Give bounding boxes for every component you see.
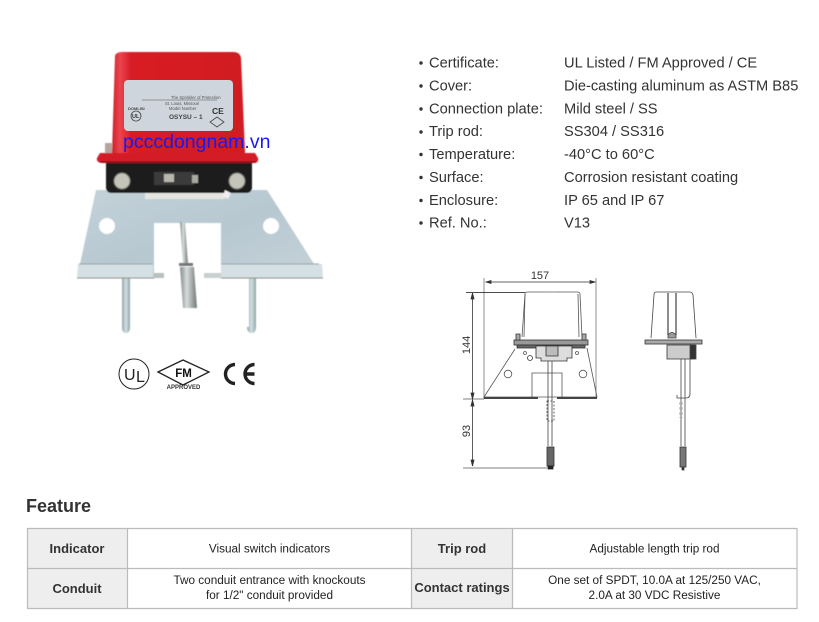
row: indicator: Indicator	[50, 541, 104, 556]
icon: UL mark: L	[136, 369, 145, 386]
heading: Feature: Feature	[26, 496, 91, 516]
spec: cover: Die-casting aluminum as ASTM B85	[564, 78, 798, 94]
spec: enclosure: IP 65 and IP 67	[564, 193, 664, 209]
row: conduit: Conduit	[52, 581, 102, 596]
row: conduit	[52, 574, 366, 602]
row: trip rod: Trip rod	[438, 541, 486, 556]
header cell backgrounds	[27, 528, 512, 608]
icon: UL mark: U	[124, 367, 136, 384]
dimension lines	[461, 270, 596, 468]
row: contact ratings: 2.0A at 30 VDC Resistive	[589, 589, 721, 602]
bracket	[484, 348, 597, 398]
spec: ref no: V13	[564, 216, 590, 232]
cover	[651, 292, 696, 338]
feature table	[27, 528, 797, 608]
dimension lines: 144	[461, 336, 473, 354]
spec: certificate: Certificate:	[429, 56, 499, 72]
mounting plate	[77, 190, 323, 278]
row: conduit: for 1/2" conduit provided	[206, 589, 333, 602]
spec: connection plate: Connection plate:	[429, 102, 543, 118]
row: contact ratings: One set of SPDT, 10.0A at 125/250 VAC,	[548, 574, 761, 587]
spec: enclosure	[419, 193, 664, 209]
spec: cover: Cover:	[429, 78, 472, 94]
product label	[124, 80, 233, 131]
product label: DOMLISI	[128, 106, 145, 111]
flange	[645, 340, 702, 359]
trip rod	[179, 222, 197, 308]
product label: UL	[132, 114, 140, 120]
switch cover outline	[522, 292, 582, 337]
row: indicator: Visual switch indicators	[209, 542, 330, 556]
specification list	[419, 56, 798, 232]
product label: Model Number	[169, 106, 197, 111]
spec: connection plate: Mild steel / SS	[564, 102, 658, 118]
row: conduit: Two conduit entrance with knockouts	[173, 574, 366, 587]
row: contact ratings	[414, 574, 761, 602]
black switch base	[106, 163, 252, 199]
spec: ref no: Ref. No.:	[429, 216, 487, 232]
spec: enclosure: Enclosure:	[429, 193, 498, 209]
icon: CE mark	[226, 364, 254, 384]
trip rod	[677, 359, 690, 470]
spec: connection plate	[419, 102, 658, 118]
dimension lines: 93	[461, 425, 473, 437]
icon: FM Approved mark: APPROVED	[167, 385, 201, 391]
watermark: pcccdongnam.vn	[123, 131, 270, 153]
spec: temperature	[419, 147, 655, 163]
flange and switch body	[514, 334, 588, 361]
trip rod	[547, 361, 554, 469]
row: trip rod	[438, 541, 719, 556]
spec: certificate	[419, 56, 757, 72]
spec: cover	[419, 78, 798, 94]
dimension lines: 157	[531, 270, 549, 282]
spec: surface: Corrosion resistant coating	[564, 170, 738, 186]
spec: surface: Surface:	[429, 170, 484, 186]
icon: UL mark	[119, 359, 149, 389]
row: contact ratings: Contact ratings	[414, 580, 510, 595]
spec: temperature: Temperature:	[429, 147, 515, 163]
spec: trip rod: Trip rod:	[429, 124, 483, 140]
spec: trip rod	[419, 124, 664, 140]
dimension drawing: side view	[645, 292, 702, 470]
icon: FM Approved mark: FM	[175, 368, 192, 380]
product label: OSYSU – 1	[169, 114, 203, 121]
spec: certificate: UL Listed / FM Approved / CE	[564, 56, 757, 72]
product label: CE	[212, 106, 224, 116]
dimension drawing: front view	[461, 270, 597, 469]
product photo: supervisory switch	[77, 52, 323, 333]
row: trip rod: Adjustable length trip rod	[590, 542, 719, 556]
product label: St. Louis, Missouri	[165, 101, 199, 106]
spec: surface	[419, 170, 738, 186]
certification logos	[119, 359, 254, 391]
row: indicator	[50, 541, 330, 556]
spec: temperature: -40°C to 60°C	[564, 147, 655, 163]
icon: FM Approved mark	[158, 360, 209, 391]
red cover	[97, 52, 258, 163]
spec: ref no	[419, 216, 590, 232]
mounting bolts	[122, 277, 256, 333]
product label: The Sprinkler of Protection	[171, 95, 221, 100]
spec: trip rod: SS304 / SS316	[564, 124, 664, 140]
